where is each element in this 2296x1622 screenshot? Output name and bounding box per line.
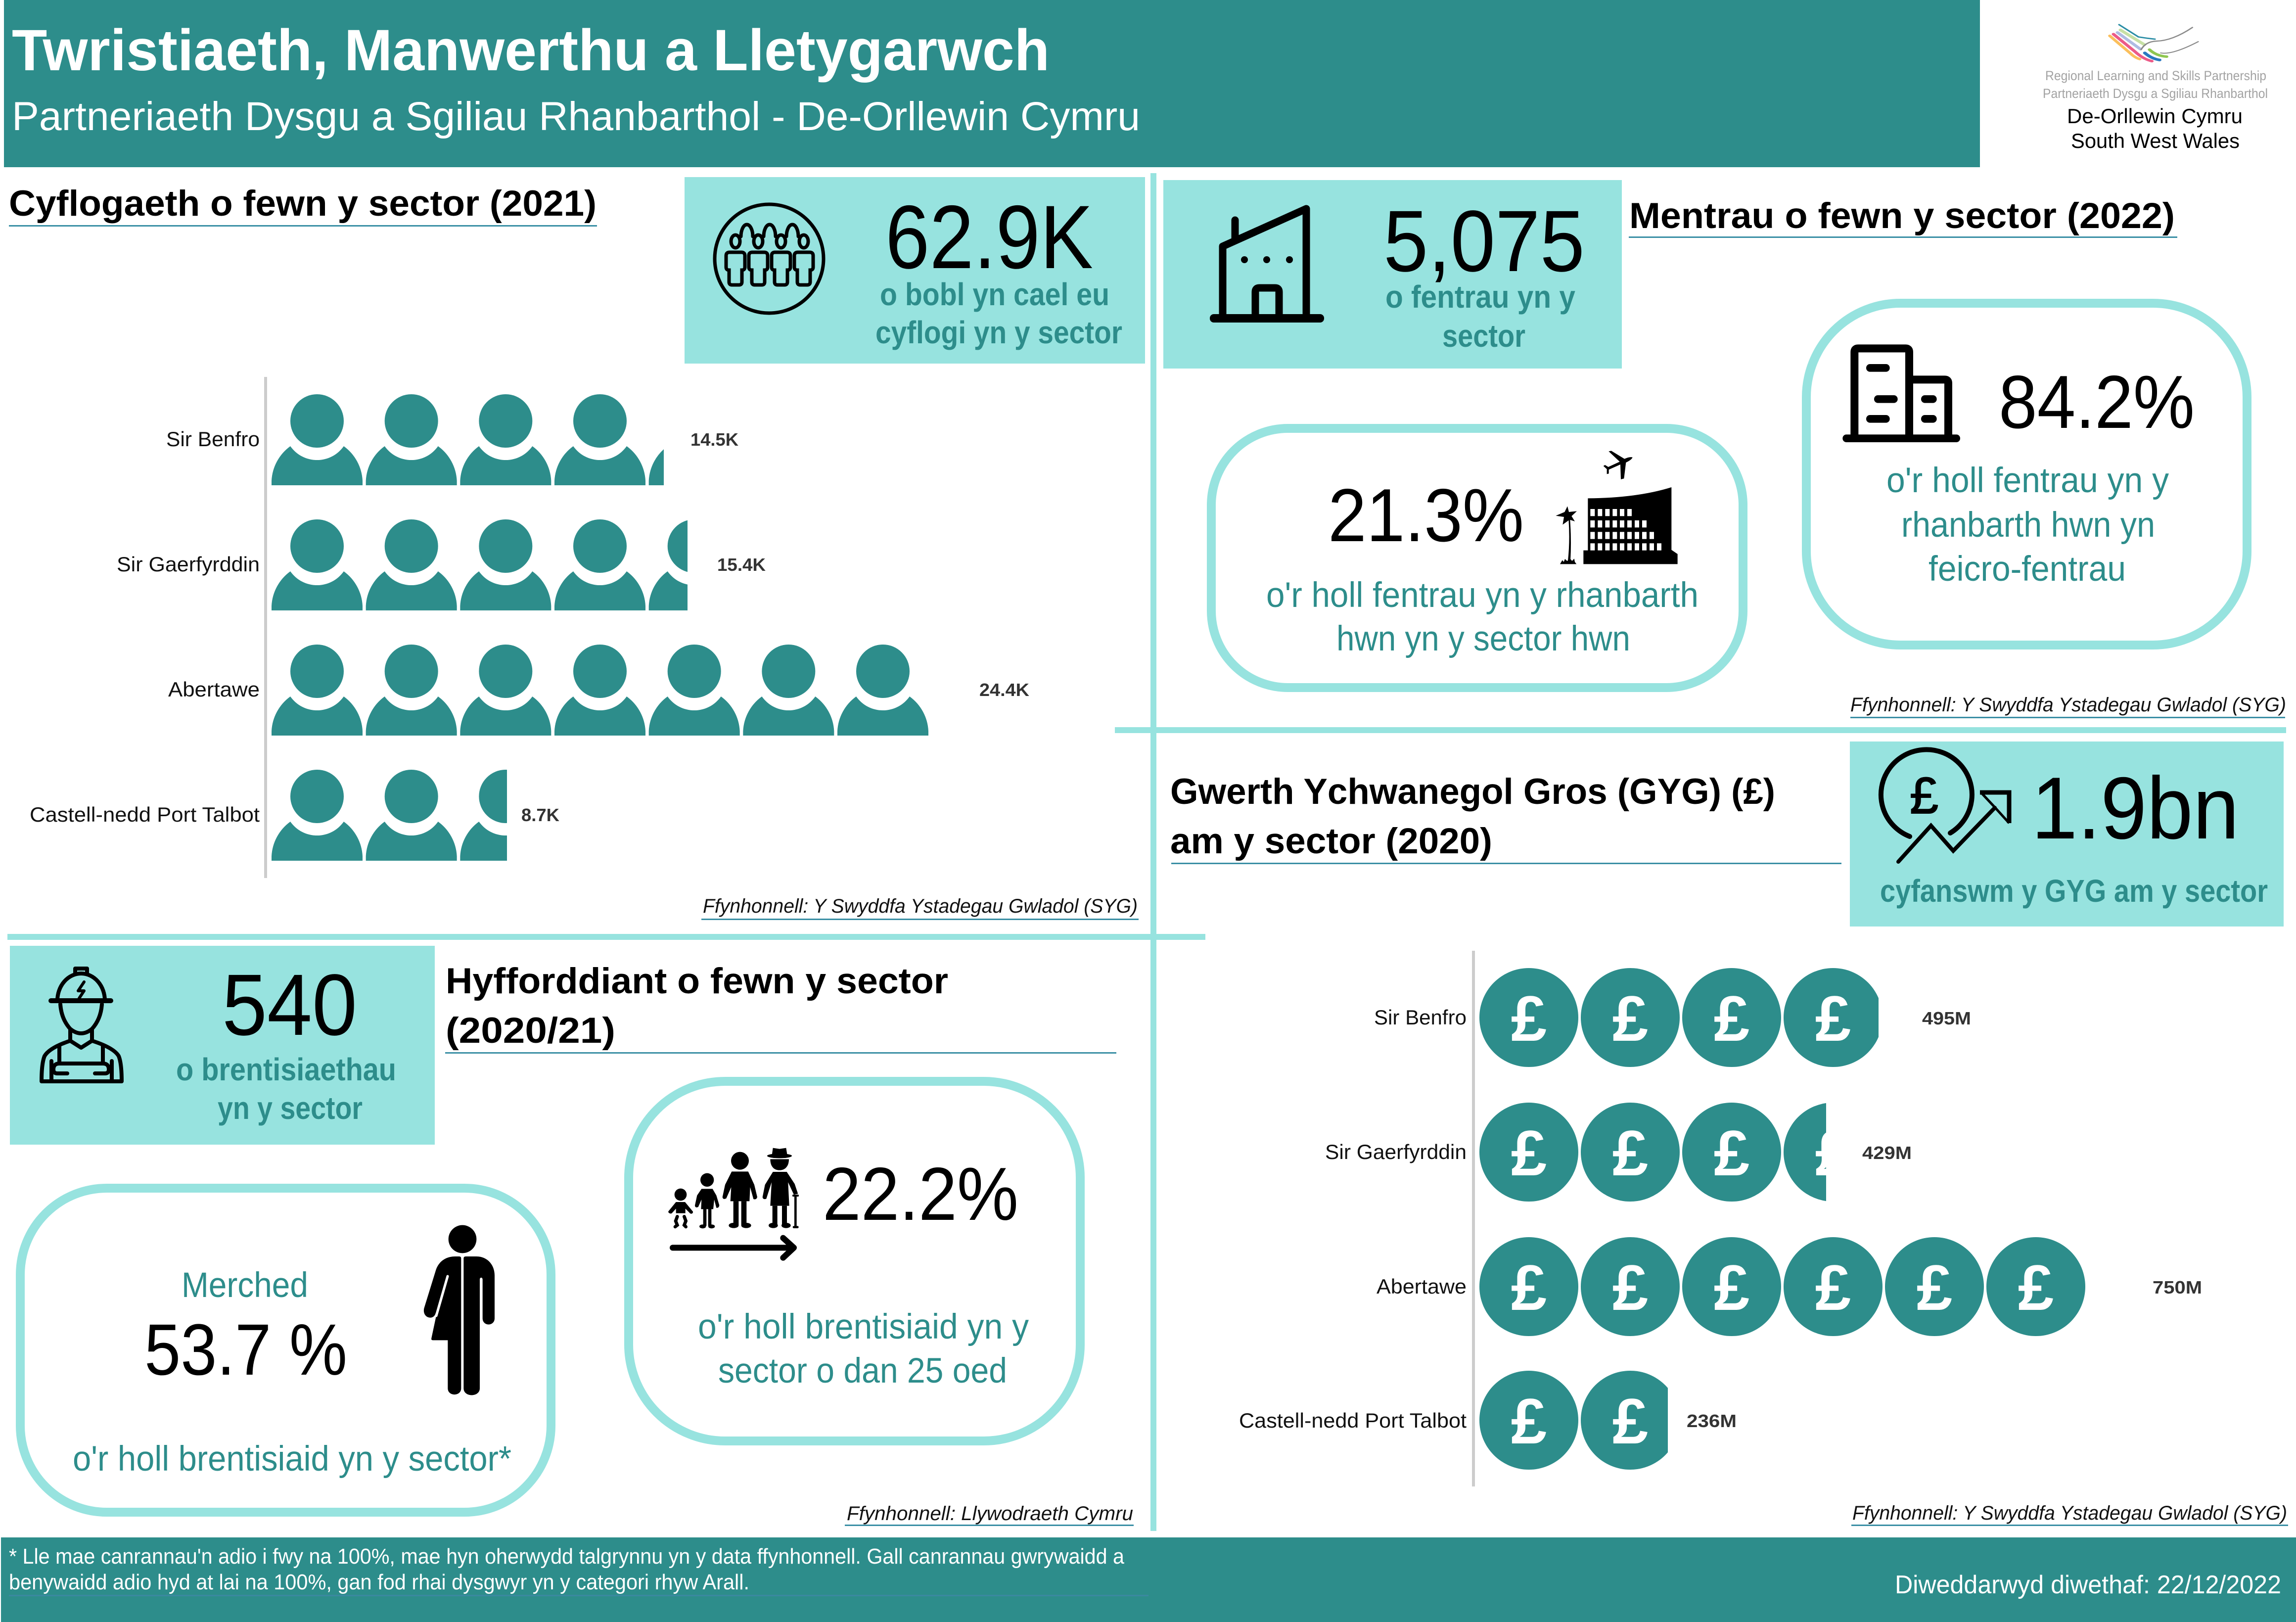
pictogram row: Castell-nedd Port Talbot: 236M [1687,1411,1737,1431]
pictogram row: Abertawe: £ [1511,1251,1547,1324]
caption line 2: rhanbarth hwn yn [1901,506,2155,545]
pictogram row: Sir Gaerfyrddin: 15.4K [717,555,766,575]
pictogram row: Abertawe: 24.4K [979,680,1029,700]
caption: o'r holl brentisiaid yn y sector* [73,1439,511,1479]
stat card: 62.9K [685,177,1145,364]
caption line 1: o fentrau yn y [1385,279,1575,315]
pictogram row: Castell-nedd Port Talbot: Castell-nedd Port Talbot [1239,1409,1467,1432]
subtitle: Partneriaeth Dysgu a Sgiliau Rhanbarthol - De-Orllewin Cymru [12,94,1140,139]
chart axis [1472,951,1475,1486]
label: Merched: Merched [182,1266,308,1305]
pictogram row: Castell-nedd Port Talbot: £ [1612,1385,1648,1457]
logo text welsh: Partneriaeth Dysgu a Sgiliau Rhanbarthol [2043,86,2268,101]
pictogram row: Castell-nedd Port Talbot: 8.7K [521,805,559,825]
pictogram row: Sir Benfro: £ [1511,982,1547,1055]
logo text english: Regional Learning and Skills Partnership [2045,68,2266,83]
caption line 2: sector [1442,318,1525,354]
logo region welsh: De-Orllewin Cymru [2067,104,2243,128]
value: 5,075: 5,075 [1383,193,1585,290]
pictogram row: Sir Gaerfyrddin: Sir Gaerfyrddin [1325,1140,1467,1163]
chart axis [264,377,267,878]
panel: employment [9,177,1145,920]
pictogram row: Castell-nedd Port Talbot: £ [1511,1385,1547,1457]
value: 84.2%: 84.2% [1999,360,2195,444]
pictogram row: Abertawe: £ [1612,1251,1648,1324]
value: 22.2%: 22.2% [823,1152,1018,1236]
icon: hotel, palm and plane [1556,451,1678,564]
pictogram row: Sir Benfro: Sir Benfro [166,427,260,451]
icon: figure half skirt [424,1225,495,1395]
callout: 22.2% [629,1081,1080,1441]
pictogram row: Sir Gaerfyrddin: 429M [1862,1143,1912,1163]
stat card: 1.9bn [1850,741,2284,927]
footnote line 1: * Lle mae canrannau'n adio i fwy na 100%, mae hyn oherwydd talgrynnu yn y data ffynhonnell. Gall canrannau gwrywaidd a [9,1544,1124,1569]
title: Twristiaeth, Manwerthu a Lletygarwch [12,18,1050,83]
pictogram row: Castell-nedd Port Talbot [30,770,559,861]
heading: training line 1: Hyfforddiant o fewn y sector [446,961,948,1001]
icon: partnership logo ribbons [2110,25,2198,61]
pictogram row: Castell-nedd Port Talbot: Castell-nedd Port Talbot [30,803,260,826]
stat card: 540 [10,946,435,1145]
heading: training line 2: (2020/21) [446,1011,615,1051]
pictogram row: Castell-nedd Port Talbot [1239,1371,1737,1470]
pictogram row: Abertawe: £ [2018,1251,2054,1324]
caption line 1: o'r holl fentrau yn y [1886,461,2169,500]
pictogram row: Sir Benfro [166,394,740,485]
source: employment: Ffynhonnell: Y Swyddfa Ystadegau Gwladol (SYG) [703,895,1138,917]
value: 540: 540 [222,957,357,1054]
footnote line 2: benywaidd adio hyd at lai na 100%, gan fod rhai dysgwyr yn y categori rhyw Arall. [9,1570,749,1594]
panel: enterprises [1163,180,2286,718]
caption line 1: o brentisiaethau [176,1052,396,1087]
horizontal divider left [7,934,1205,940]
icon: construction worker [42,969,122,1081]
logo block [2043,25,2268,152]
pictogram row: Abertawe [168,645,1029,736]
pictogram row: Sir Gaerfyrddin [117,519,766,610]
pictogram row: Abertawe [1377,1237,2202,1336]
pictogram row: Abertawe: £ [1917,1251,1952,1324]
vertical divider [1150,173,1156,1531]
heading: GVA line 2: am y sector (2020) [1170,821,1492,861]
heading: GVA line 1: Gwerth Ychwanegol Gros (GYG) (£) [1170,772,1775,812]
footnote underline [9,1595,1148,1596]
pictogram row: Sir Gaerfyrddin: £ [1815,1117,1851,1189]
panel: gross value added [1170,741,2288,1526]
value: 1.9bn: 1.9bn [2031,759,2239,857]
icon: small building [1210,209,1324,323]
logo region english: South West Wales [2071,129,2240,152]
stat card: 5,075 [1163,180,1622,369]
caption line 1: o'r holl fentrau yn y rhanbarth [1266,576,1699,615]
source: enterprises: Ffynhonnell: Y Swyddfa Ystadegau Gwladol (SYG) [1850,694,2286,716]
caption line 3: feicro-fentrau [1929,550,2126,589]
pictogram row: Abertawe: £ [1815,1251,1851,1324]
heading underline [9,225,597,227]
pictogram row: Sir Benfro: £ [1612,982,1648,1055]
icon: ages with arrow [668,1148,799,1258]
caption line 2: hwn yn y sector hwn [1336,619,1630,658]
pictogram row: Sir Gaerfyrddin: £ [1714,1117,1749,1189]
footer band [1,1537,2296,1622]
heading underline [1629,236,2177,238]
heading: enterprises: Mentrau o fewn y sector (2022) [1629,196,2175,236]
last updated: Diweddarwyd diwethaf: 22/12/2022 [1895,1571,2281,1599]
icon: pound growth [1881,749,2009,862]
horizontal divider right [1115,727,2286,733]
heading: employment: Cyflogaeth o fewn y sector (2021) [9,184,597,224]
caption line 2: yn y sector [218,1090,363,1126]
panel: training [10,946,1134,1526]
pictogram row: Sir Gaerfyrddin: £ [1511,1117,1547,1189]
callout: 84.2% [1806,303,2247,645]
pictogram row: Sir Gaerfyrddin: Sir Gaerfyrddin [117,553,260,576]
caption line 2: cyflogi yn y sector [875,315,1122,350]
callout: women 53.7% [20,1188,551,1512]
pictogram row: Abertawe: Abertawe [1377,1275,1467,1298]
heading underline [445,1052,1116,1054]
pictogram row: Sir Gaerfyrddin [1325,1103,1912,1202]
pictogram row: Abertawe: £ [1714,1251,1749,1324]
header band [4,0,1980,167]
value: 62.9K: 62.9K [885,186,1093,287]
pictogram row: Sir Benfro: 495M [1922,1008,1971,1028]
pictogram row: Sir Benfro [1374,968,1971,1067]
pictogram row: Sir Benfro: £ [1714,982,1749,1055]
pictogram row: Sir Gaerfyrddin: £ [1612,1117,1648,1189]
caption line 1: o bobl yn cael eu [880,277,1109,312]
pictogram row: Sir Benfro: 14.5K [690,429,738,450]
heading underline [1171,863,1841,864]
callout: 21.3% [1211,428,1743,688]
icon: people in circle [715,204,824,313]
source: training: Ffynhonnell: Llywodraeth Cymru [847,1503,1133,1525]
value: 21.3%: 21.3% [1328,473,1524,557]
source: GVA: Ffynhonnell: Y Swyddfa Ystadegau Gwladol (SYG) [1852,1502,2287,1524]
caption line 2: sector o dan 25 oed [718,1351,1007,1390]
pictogram row: Abertawe: Abertawe [168,678,260,701]
icon: office blocks [1842,348,1960,442]
pictogram row: Abertawe: 750M [2153,1277,2202,1298]
pictogram row: Sir Benfro: £ [1815,982,1851,1055]
icon: pound growth: £ [1910,767,1938,825]
value: 53.7 %: 53.7 % [144,1309,347,1390]
pictogram row: Sir Benfro: Sir Benfro [1374,1006,1467,1029]
caption line 1: o'r holl brentisiaid yn y [698,1307,1029,1346]
